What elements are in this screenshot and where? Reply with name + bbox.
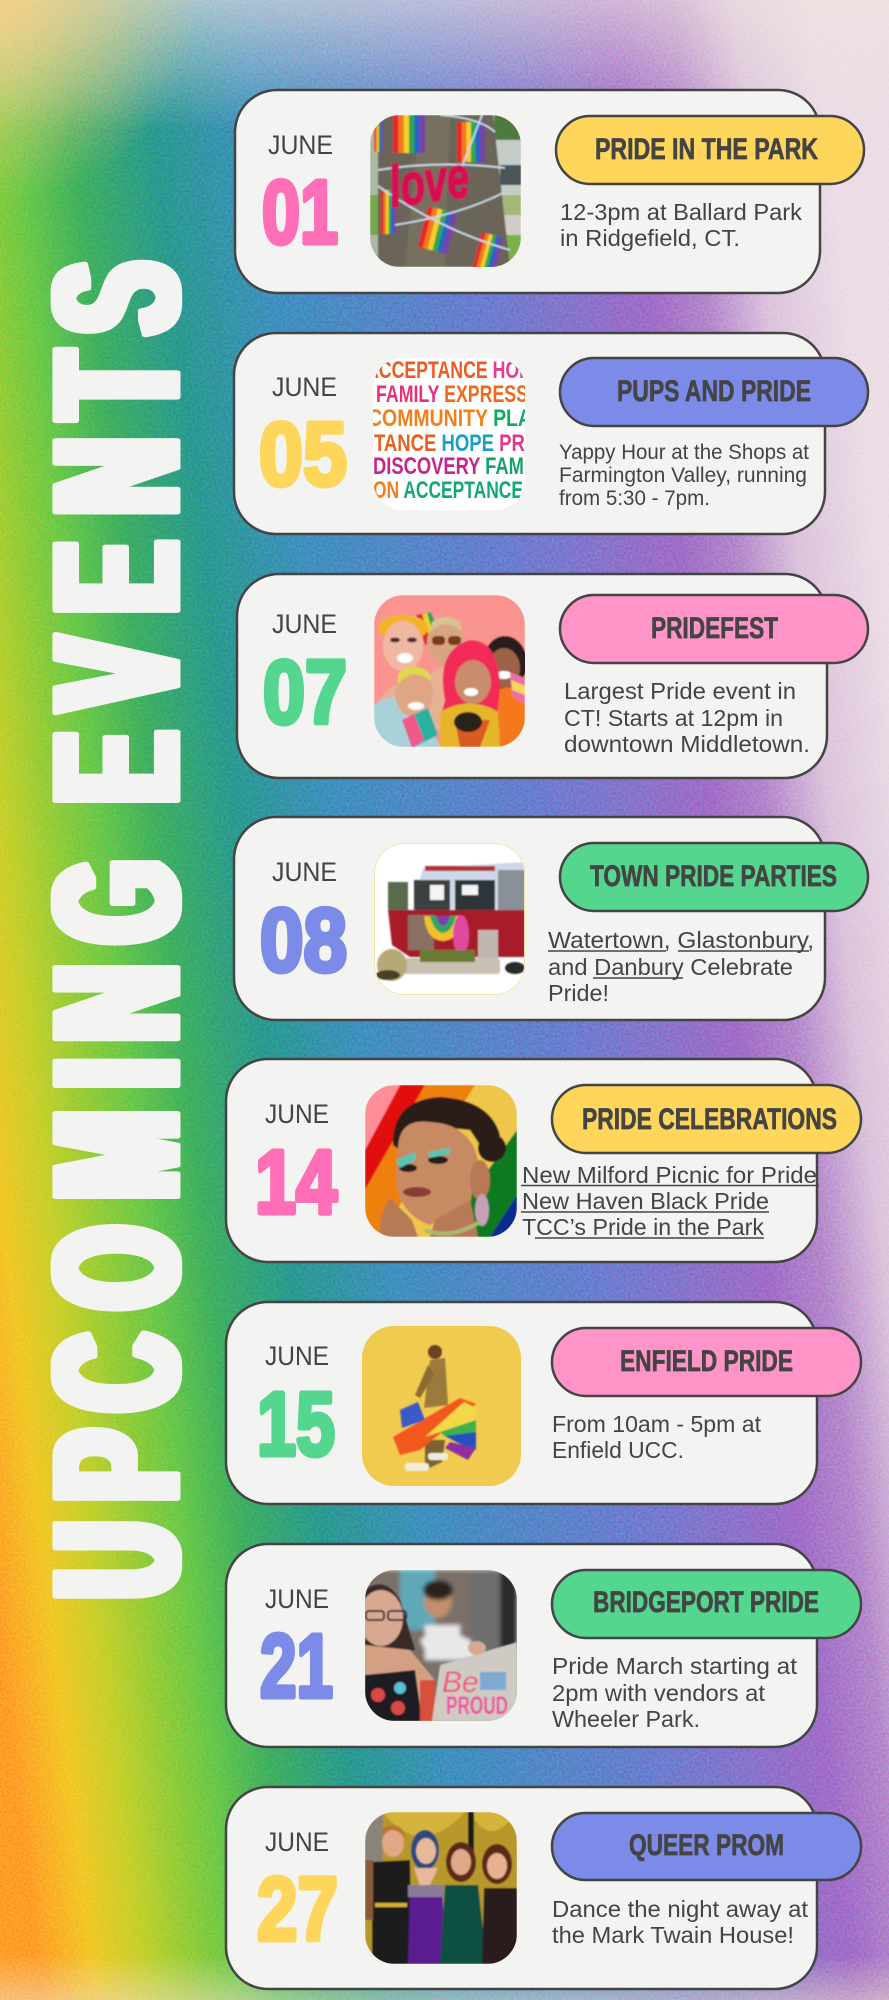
text: event details <box>552 1896 809 1948</box>
photo: friends with pride flags <box>374 595 527 748</box>
text: event links <box>521 1162 819 1240</box>
date number: 21: 21 <box>260 1617 333 1717</box>
pill: enfield pride: ENFIELD PRIDE <box>620 1345 793 1378</box>
pill: bridgeport pride: BRIDGEPORT PRIDE <box>593 1586 819 1619</box>
text: event details: From 10am - 5pm at <box>552 1411 762 1437</box>
photo: colorful words pattern: DISCOVERY FAMI <box>373 453 529 480</box>
pill: pups and pride <box>560 358 868 426</box>
panel: event june 27 <box>226 1787 861 1989</box>
pill: pups and pride: PUPS AND PRIDE <box>617 375 811 408</box>
text: event details: Dance the night away at <box>552 1896 809 1922</box>
date number: 01: 01 <box>262 163 338 263</box>
text: event details: 2pm with vendors at <box>552 1680 766 1706</box>
text: event links: TCC’s Pride in the Park <box>522 1214 764 1240</box>
photo: pride march participants: Be <box>442 1666 479 1699</box>
photo: colorful words pattern: FAMILY EXPRESS <box>376 381 528 408</box>
date number: 14: 14 <box>255 1133 337 1233</box>
photo: colorful words pattern: ACCEPTANCE HOP <box>366 357 531 384</box>
text: event details <box>559 441 809 510</box>
pill: pride celebrations <box>552 1085 861 1153</box>
text: event details <box>552 1411 762 1463</box>
panel: event june 07 <box>237 574 868 778</box>
pill: pridefest <box>560 595 868 663</box>
photo: love balloon on tree <box>370 115 521 276</box>
text: event details: Yappy Hour at the Shops at <box>559 441 809 464</box>
text: event details: Farmington Valley, running <box>559 464 807 487</box>
text: event details: Pride March starting at <box>552 1653 798 1679</box>
date label: june: JUNE <box>272 609 337 639</box>
date number: 05: 05 <box>259 405 347 505</box>
date label: june: JUNE <box>265 1584 329 1614</box>
photo: fire truck with pride decoration <box>374 843 525 995</box>
photo: colorful words pattern: COMMUNITY PLA <box>368 405 532 432</box>
photo: queer prom group <box>365 1812 517 1964</box>
photo: pride march participants: PROUD <box>446 1692 508 1720</box>
date number: 15: 15 <box>257 1375 335 1475</box>
text: event details: Largest Pride event in <box>564 678 796 704</box>
text: event details: from 5:30 - 7pm. <box>559 487 710 510</box>
text: event details: 12-3pm at Ballard Park <box>560 199 803 225</box>
text: event details: Pride! <box>548 980 609 1006</box>
text: event details <box>548 927 814 1006</box>
text: event links: New Milford Picnic for Pride <box>522 1162 817 1188</box>
date number: 08: 08 <box>260 891 347 991</box>
pill: pride in the park <box>556 116 864 184</box>
panel: event june 21 <box>226 1544 861 1747</box>
pill: queer prom <box>552 1813 861 1880</box>
pill: bridgeport pride <box>552 1570 861 1638</box>
photo: colorful words pattern: ON ACCEPTANCE <box>373 477 523 504</box>
date label: june: JUNE <box>268 130 333 160</box>
photo: colorful words pattern <box>366 357 532 510</box>
text: event details: CT! Starts at 12pm in <box>564 705 783 731</box>
title: upcoming events: UPCOMING EVENTS <box>18 263 215 1598</box>
panel: event june 01 <box>235 90 864 293</box>
date label: june: JUNE <box>272 857 337 887</box>
pill: pridefest: PRIDEFEST <box>651 612 778 645</box>
pill: enfield pride <box>552 1328 861 1396</box>
date label: june: JUNE <box>265 1341 329 1371</box>
panel: event june 08 <box>234 817 868 1020</box>
date number: 27: 27 <box>257 1860 338 1960</box>
text: event details: Watertown, Glastonbury, <box>548 927 814 953</box>
text: event details: downtown Middletown. <box>564 731 810 757</box>
pill: town pride parties <box>560 843 868 911</box>
photo: pride march participants <box>359 1570 517 1721</box>
date label: june: JUNE <box>272 372 337 402</box>
photo: person with rainbow flag on yellow <box>362 1326 521 1486</box>
photo: colorful words pattern: TANCE HOPE PRI <box>374 430 530 457</box>
text: event details: and Danbury Celebrate <box>548 954 793 980</box>
date label: june: JUNE <box>265 1827 329 1857</box>
pill: queer prom: QUEER PROM <box>629 1829 784 1862</box>
text: event links: New Haven Black Pride <box>522 1188 769 1214</box>
text: event details <box>552 1653 798 1732</box>
text: event details <box>560 199 803 251</box>
text: event details: in Ridgefield, CT. <box>560 225 740 251</box>
panel: event june 15 <box>226 1302 861 1504</box>
text: event details: Enfield UCC. <box>552 1437 684 1463</box>
panel: event june 14 <box>226 1059 861 1262</box>
date label: june: JUNE <box>265 1099 329 1129</box>
photo: portrait with rainbow flag <box>365 1085 517 1237</box>
pill: pride in the park: PRIDE IN THE PARK <box>595 133 818 166</box>
date number: 07: 07 <box>263 643 347 743</box>
photo: love balloon on tree: love <box>385 144 473 220</box>
text: event details <box>564 678 810 757</box>
text: event details: the Mark Twain House! <box>552 1922 794 1948</box>
panel: event june 05 <box>234 333 868 534</box>
text: event details: Wheeler Park. <box>552 1706 700 1732</box>
